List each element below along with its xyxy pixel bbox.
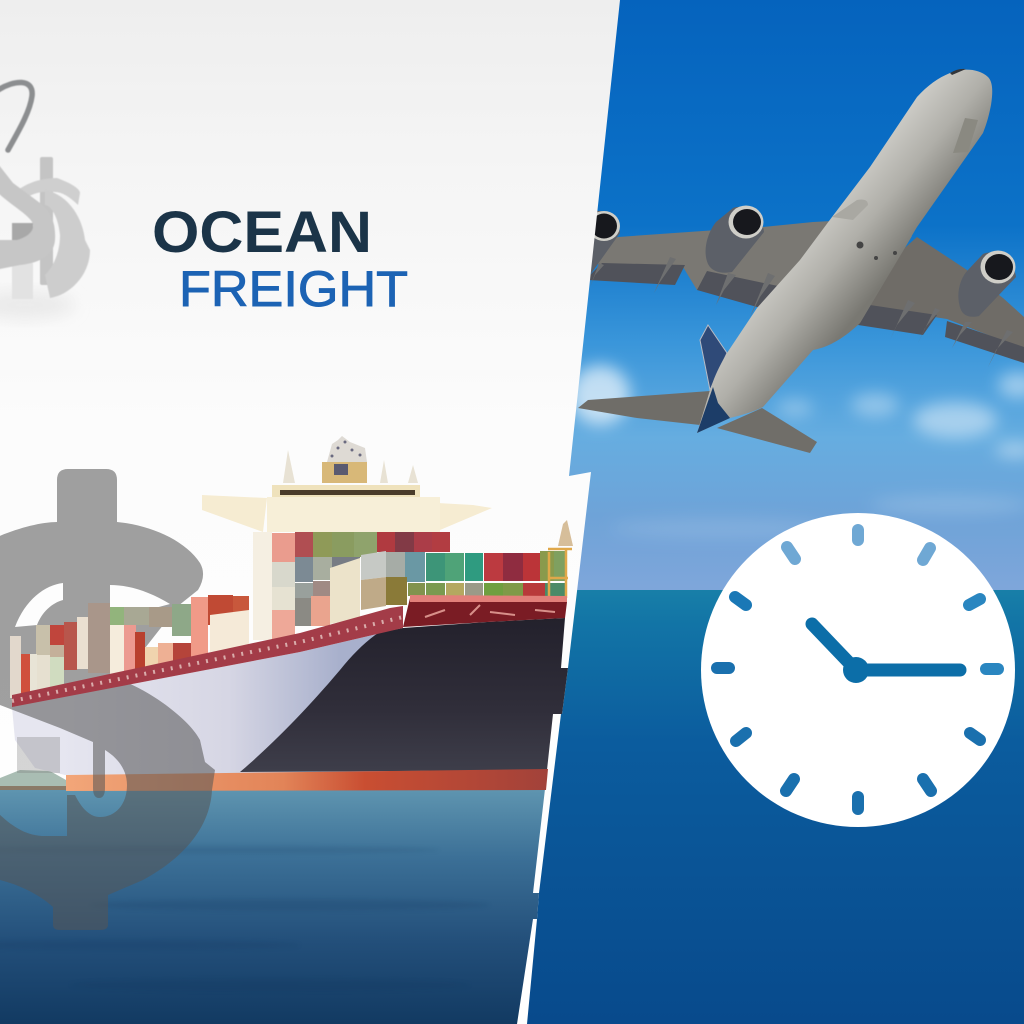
- title: ocean freight: OCEAN: [152, 200, 372, 265]
- forward row lower: [408, 583, 425, 596]
- white column: [253, 532, 272, 640]
- forward container blocks: [10, 595, 249, 698]
- waterline: [66, 769, 548, 791]
- wing root fairing: [832, 200, 868, 220]
- icon: clock: [701, 513, 1015, 827]
- icon: large grey dollar sign overlay: [0, 469, 215, 930]
- right stabilizer: [717, 408, 817, 453]
- left engine: [588, 211, 620, 275]
- inner engine: [706, 206, 764, 273]
- title: ocean freight: FREIGHT: [179, 261, 408, 317]
- bridge wings: [202, 495, 267, 532]
- hull side: [12, 628, 420, 775]
- left wing: [588, 220, 850, 317]
- icon: hook above stacked dollar signs: [0, 82, 90, 319]
- fuselage: [697, 70, 992, 433]
- illustration: container ship hull and shore: [0, 618, 568, 791]
- right wing: [858, 237, 1024, 367]
- illustration: airplane: [578, 69, 1024, 453]
- distant shore: [0, 770, 70, 790]
- title: ocean freight: [152, 200, 408, 317]
- main container stack: [272, 533, 295, 562]
- front dollar band: [0, 160, 55, 270]
- tail fin: [700, 325, 727, 390]
- bridge block: [267, 497, 440, 532]
- bow bulwark: [403, 598, 567, 627]
- wheelhouse top: [322, 462, 367, 483]
- illustration: container ship superstructure and cargo: [10, 436, 573, 707]
- middle stack: [361, 551, 386, 580]
- back dollar stem: [40, 157, 53, 285]
- left stabilizer: [578, 391, 710, 425]
- yellow gantry: [548, 549, 572, 602]
- forward row upper: [426, 553, 445, 581]
- clock tick marks: [717, 530, 998, 809]
- ghost shape inside dollar: [17, 737, 60, 773]
- right engine: [958, 250, 1016, 317]
- panel: air freight sky and sea background: [500, 0, 1024, 1024]
- deck rail: [12, 606, 403, 707]
- back dollar curves: [10, 178, 80, 205]
- panel: ocean freight background: [0, 0, 620, 1024]
- clock hands: [812, 624, 960, 670]
- dark bow: [240, 618, 568, 772]
- tail cone: [697, 387, 730, 433]
- nose details: [856, 69, 978, 260]
- belly fairing: [777, 236, 912, 350]
